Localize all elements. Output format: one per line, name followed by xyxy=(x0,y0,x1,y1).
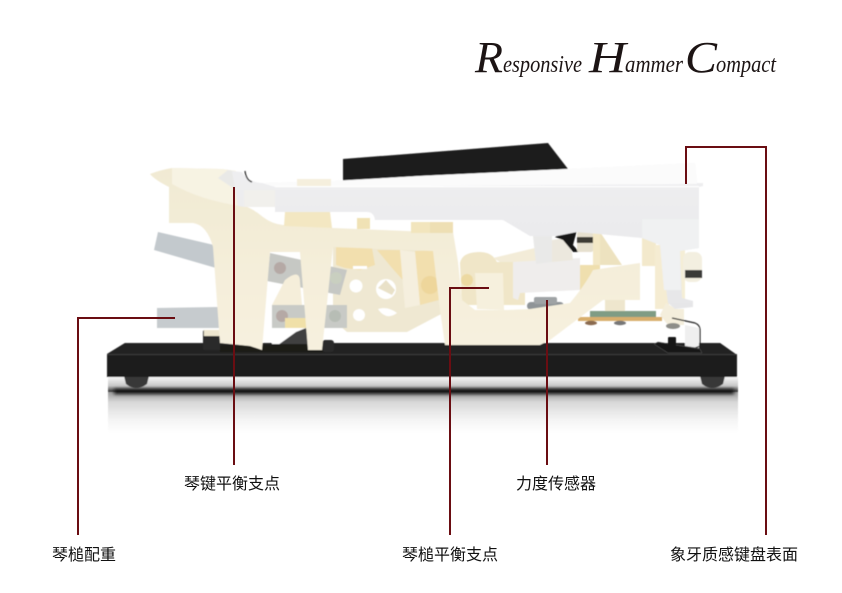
key front pin and felt xyxy=(678,250,702,300)
title: ammer xyxy=(625,52,684,78)
rubber stopper xyxy=(555,229,593,252)
title: esponsive xyxy=(503,52,582,78)
hammer felt post and base fixings xyxy=(203,330,334,352)
title: R xyxy=(474,33,503,82)
label: ivory-feel key surface: 象牙质感键盘表面 xyxy=(670,545,798,564)
piano key action illustration xyxy=(107,143,738,433)
label: hammer weight: 琴槌配重 xyxy=(52,546,116,564)
label: key balance point: 琴键平衡支点 xyxy=(184,475,280,493)
front block xyxy=(475,273,504,310)
grey hammer weights xyxy=(154,232,219,328)
small cream pads under key xyxy=(284,212,453,233)
key top surface xyxy=(262,163,697,187)
key neck xyxy=(244,190,275,207)
tan mechanism behind jack xyxy=(460,248,536,305)
title: ompact xyxy=(716,52,777,78)
metal brackets xyxy=(267,253,347,345)
title: C xyxy=(685,33,718,82)
floor reflection and shadow xyxy=(108,377,738,433)
leader line: hammer weight xyxy=(78,318,175,535)
black key behind xyxy=(343,143,568,181)
hammer head highlight xyxy=(172,168,240,206)
key side panel xyxy=(642,219,699,290)
rear metal bracket xyxy=(654,318,702,353)
cream hammer body xyxy=(150,168,640,350)
force sensor xyxy=(527,297,564,310)
feet xyxy=(124,376,725,388)
black base board xyxy=(107,343,737,377)
translucent white jack xyxy=(513,236,580,300)
title xyxy=(474,33,777,82)
leader line: key balance point xyxy=(233,187,235,465)
label: force sensor: 力度传感器 xyxy=(516,475,596,493)
leader line: force sensor xyxy=(546,300,548,465)
title: H xyxy=(588,33,629,82)
rear tan web with holes xyxy=(333,240,445,332)
rear cream supports xyxy=(580,232,684,325)
leader line: hammer balance point xyxy=(450,288,489,535)
leader line: key surface xyxy=(686,147,766,535)
circuit board xyxy=(578,311,680,329)
white key xyxy=(232,163,703,309)
label: hammer balance point: 琴槌平衡支点 xyxy=(402,546,498,564)
